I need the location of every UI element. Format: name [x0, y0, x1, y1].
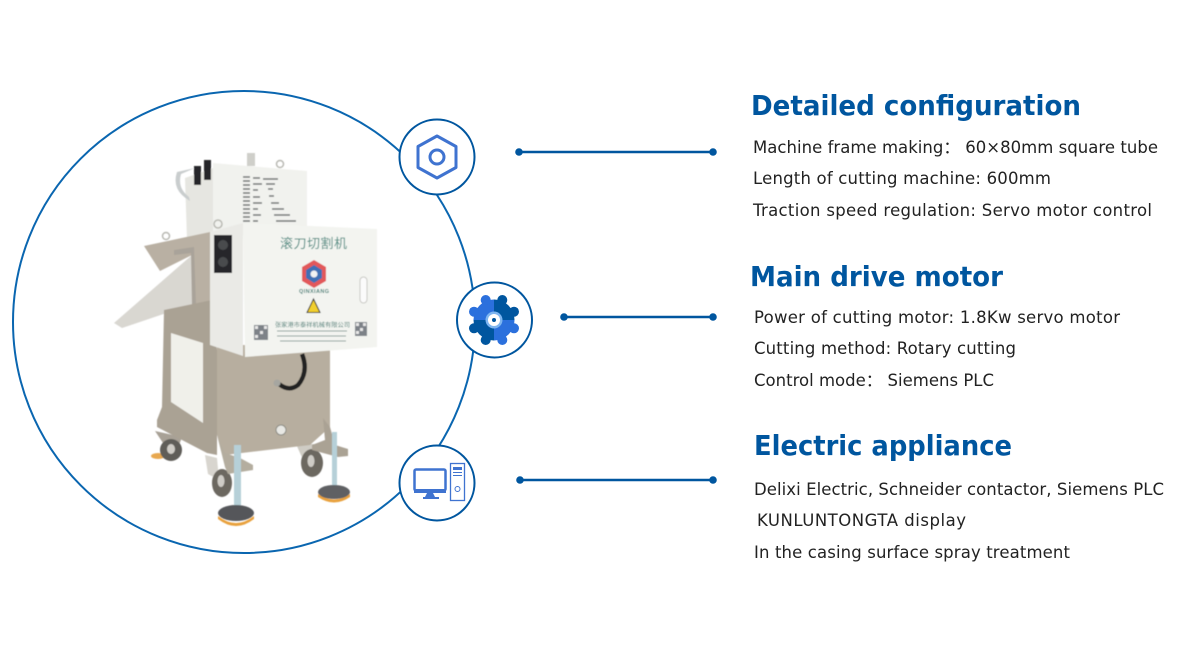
specification list: Power of cutting motor: 1.8Kw servo motor	[754, 308, 1120, 327]
cabinet title: 滚刀切割机	[280, 236, 347, 251]
icon badge: computer	[400, 446, 474, 520]
heading: Detailed configuration	[751, 89, 1081, 122]
logo	[302, 260, 326, 288]
brand: QINXIANG	[299, 289, 329, 295]
connector line 2	[560, 313, 717, 321]
section: electric appliance	[754, 429, 1164, 562]
specification list: Traction speed regulation: Servo motor control	[752, 201, 1152, 220]
specification list: In the casing surface spray treatment	[754, 543, 1071, 562]
specification list: Machine frame making： 60×80mm square tube	[753, 138, 1158, 157]
heading: Main drive motor	[750, 260, 1003, 293]
leveling feet	[217, 418, 350, 526]
specification list: Delixi Electric, Schneider contactor, Siemens PLC	[754, 480, 1164, 499]
specification list: Cutting method: Rotary cutting	[754, 339, 1016, 358]
specification list	[754, 480, 1164, 562]
upper cabinet	[176, 153, 307, 240]
specification list	[752, 138, 1158, 220]
main electrical cabinet	[210, 223, 377, 357]
lower frame side panel	[157, 300, 217, 455]
large circle outline	[13, 91, 475, 553]
specification list: KUNLUNTONGTA display	[757, 511, 966, 530]
machine photo illustration	[114, 153, 377, 526]
heading: Electric appliance	[754, 429, 1012, 462]
warning triangle	[307, 299, 320, 312]
specification list: Length of cutting machine: 600mm	[753, 169, 1051, 188]
contact details	[277, 331, 347, 341]
lower frame front body	[217, 345, 330, 455]
company name: 张家港市泰祥机械有限公司	[275, 321, 350, 329]
section: main drive motor	[750, 260, 1120, 390]
section: detailed configuration	[751, 89, 1158, 220]
specification list: Control mode： Siemens PLC	[754, 371, 994, 390]
icon badge: gear puzzle	[457, 282, 532, 358]
chute	[114, 220, 222, 345]
icon badge: hex nut	[400, 120, 474, 194]
rear casters and front casters	[151, 431, 323, 497]
QR codes	[254, 322, 367, 340]
conduit	[279, 354, 305, 388]
connector line 3	[516, 476, 717, 484]
connector line 1	[515, 148, 717, 156]
specification list	[754, 308, 1120, 390]
